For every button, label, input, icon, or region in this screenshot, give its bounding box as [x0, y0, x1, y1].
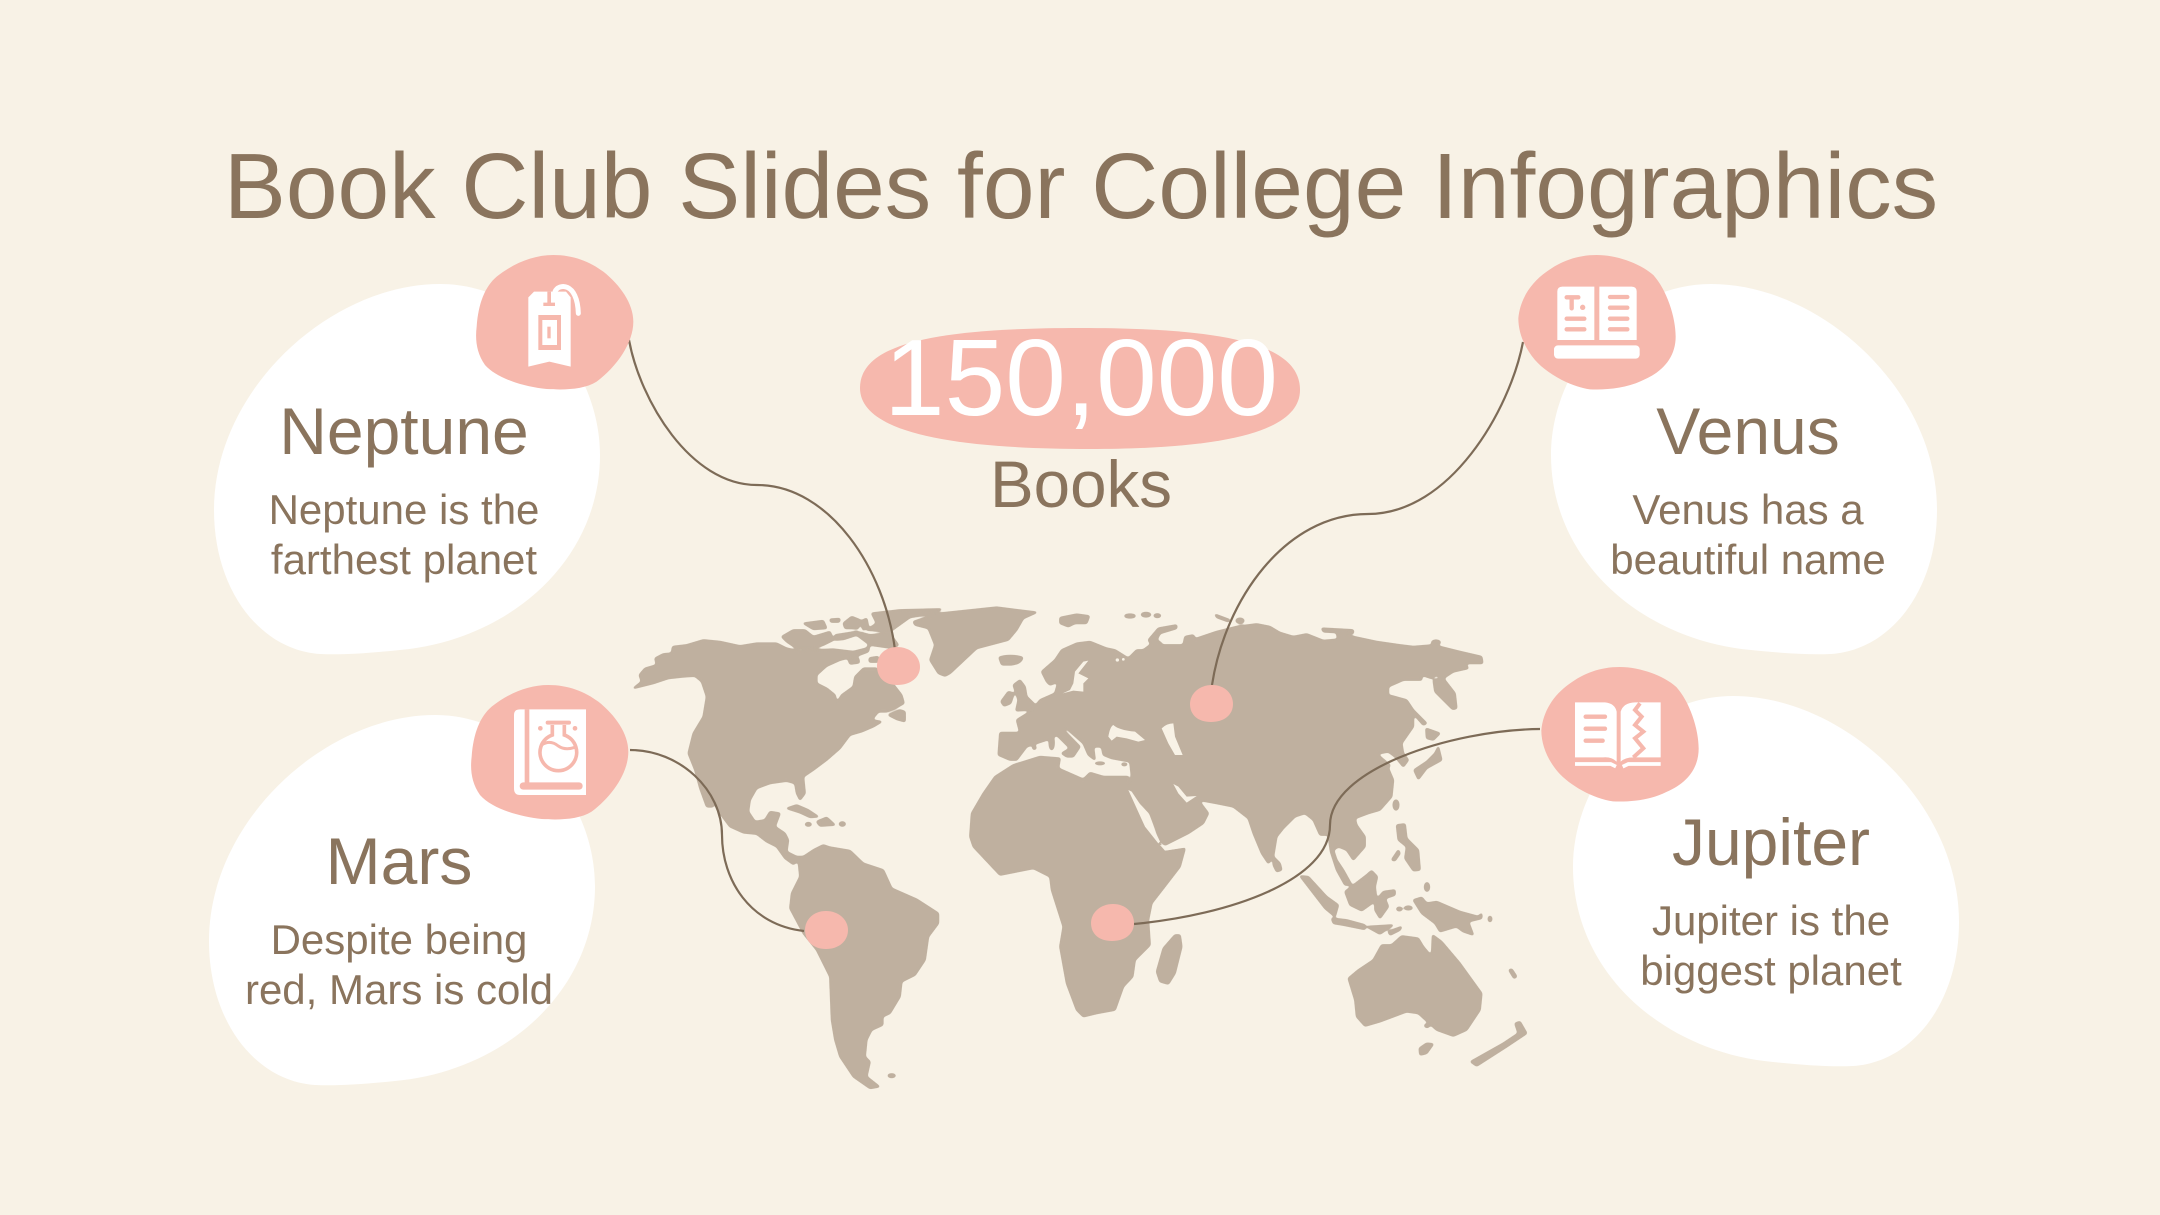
panel: Jupiter background — [1573, 696, 1959, 1066]
connector: Venus to Asia — [1212, 342, 1523, 685]
panel: Mars background — [209, 715, 595, 1085]
heading: Neptune: Neptune — [279, 394, 529, 468]
description: Neptune: Neptune is the — [269, 486, 539, 533]
heading: Mars: Mars — [326, 824, 472, 898]
map marker: South America — [805, 911, 848, 949]
stat badge background — [860, 328, 1300, 449]
world map — [633, 607, 1527, 1088]
map: inland seas — [1063, 658, 1197, 851]
title: Book Club Slides for College Infographics — [224, 134, 1938, 238]
text block: Venus — [1610, 394, 1886, 583]
stat number: 150,000 — [884, 317, 1278, 439]
heading: Jupiter: Jupiter — [1672, 805, 1870, 879]
panel: Venus background — [1551, 284, 1937, 654]
description: Jupiter: Jupiter is the — [1652, 897, 1890, 944]
connector: Jupiter to Africa — [1134, 729, 1540, 924]
text block: Mars — [245, 824, 553, 1013]
description: Venus: Venus has a — [1632, 486, 1864, 533]
map marker: North America — [877, 647, 920, 685]
panel: Neptune background — [214, 284, 600, 654]
description: Venus: beautiful name — [1610, 536, 1886, 583]
connector: Mars to South America — [630, 750, 804, 931]
description: Neptune: farthest planet — [271, 536, 537, 583]
map marker: Asia — [1190, 685, 1233, 722]
connector: Neptune to North America — [629, 340, 895, 650]
icon: open book badge (Venus) — [1518, 255, 1676, 389]
icon: science book badge (Mars) — [471, 685, 628, 819]
stat label: Books — [990, 448, 1172, 521]
description: Mars: Despite being — [271, 916, 527, 963]
map: Europe, Asia, Africa and Oceania — [970, 613, 1527, 1066]
description: Mars: red, Mars is cold — [245, 966, 553, 1013]
description: Jupiter: biggest planet — [1640, 947, 1902, 994]
heading: Venus: Venus — [1656, 394, 1840, 468]
text block: Jupiter — [1640, 805, 1902, 994]
text block: Neptune — [269, 394, 539, 583]
icon: bookmark badge (Neptune) — [476, 255, 633, 389]
map marker: Africa — [1091, 904, 1134, 941]
icon: torn book badge (Jupiter) — [1541, 667, 1699, 801]
map: the Americas and Greenland — [633, 607, 1037, 1088]
